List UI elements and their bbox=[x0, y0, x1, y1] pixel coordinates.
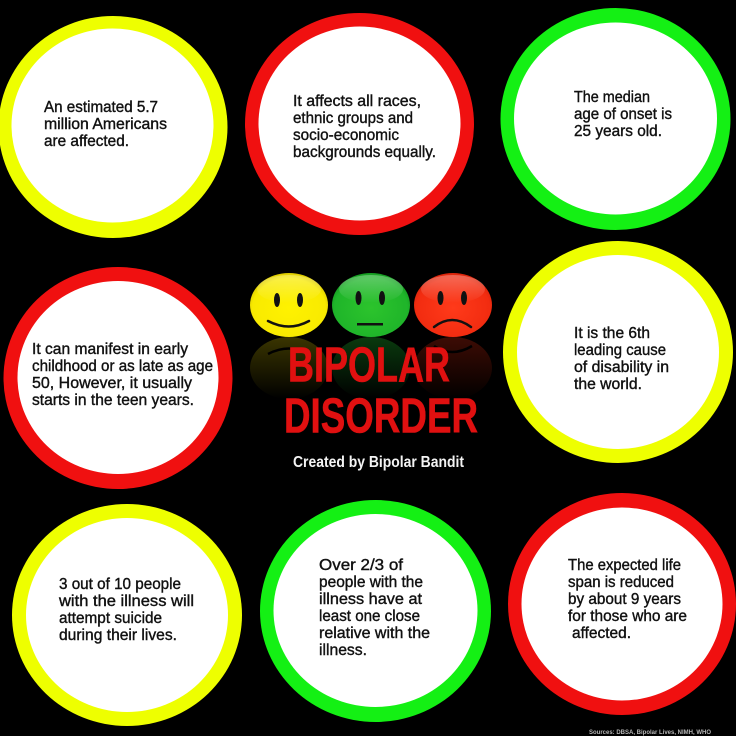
panel: 6th leading cause: of disability in bbox=[574, 359, 669, 376]
panel: life span reduced: span is reduced bbox=[568, 574, 674, 591]
panel: attempt suicide: attempt suicide bbox=[59, 610, 162, 627]
panel: median age of onset: age of onset is bbox=[574, 106, 672, 123]
panel: all races: socio-economic bbox=[293, 127, 399, 144]
panel: all races: backgrounds equally. bbox=[293, 144, 436, 161]
panel: median age of onset bbox=[500, 8, 730, 230]
panel: all races: It affects all races, bbox=[293, 93, 421, 110]
panel: attempt suicide bbox=[12, 504, 242, 726]
sources note: Sources: DBSA, Bipolar Lives, NIMH, WHO bbox=[589, 729, 711, 736]
title bbox=[284, 338, 478, 444]
icon: red sad face bbox=[414, 273, 492, 337]
panel: manifest in early childhood: childhood or as late as age bbox=[32, 358, 213, 375]
panel: attempt suicide: during their lives. bbox=[59, 627, 177, 644]
panel: life span reduced: The expected life bbox=[568, 557, 681, 574]
panel: 6th leading cause: leading cause bbox=[574, 342, 666, 359]
panel: 5.7 million Americans: are affected. bbox=[44, 133, 129, 150]
panel: close relative: relative with the bbox=[319, 625, 430, 642]
panel: manifest in early childhood: starts in the teen years. bbox=[32, 392, 194, 409]
panel: close relative: illness have at bbox=[319, 591, 423, 608]
panel: 5.7 million Americans: million Americans bbox=[44, 116, 167, 133]
credit line: Created by Bipolar Bandit bbox=[293, 454, 465, 471]
panel: life span reduced: for those who are bbox=[568, 608, 687, 625]
panel: attempt suicide: 3 out of 10 people bbox=[59, 576, 181, 593]
panel: manifest in early childhood: 50, However, it usually bbox=[32, 375, 192, 392]
panel: life span reduced bbox=[508, 493, 736, 715]
panel: 5.7 million Americans: An estimated 5.7 bbox=[44, 99, 158, 116]
panel: 6th leading cause: It is the 6th bbox=[574, 325, 650, 342]
panel: 6th leading cause: the world. bbox=[574, 376, 642, 393]
panel: all races: ethnic groups and bbox=[293, 110, 413, 127]
panel: close relative: illness. bbox=[319, 642, 367, 659]
panel: attempt suicide: with the illness will bbox=[58, 593, 194, 610]
panel: median age of onset: 25 years old. bbox=[574, 123, 662, 140]
panel: close relative: people with the bbox=[319, 574, 423, 591]
panel: 6th leading cause bbox=[503, 241, 733, 463]
panel: median age of onset: The median bbox=[574, 89, 650, 106]
panel: manifest in early childhood bbox=[4, 267, 232, 489]
title: BIPOLAR bbox=[288, 338, 450, 392]
panel: life span reduced: affected. bbox=[572, 625, 631, 642]
panel: manifest in early childhood: It can manifest in early bbox=[32, 341, 188, 358]
panel: life span reduced: by about 9 years bbox=[568, 591, 681, 608]
title: DISORDER bbox=[284, 390, 478, 444]
icon: green neutral face bbox=[332, 273, 410, 337]
panel: close relative bbox=[260, 500, 491, 722]
icon: face reflections bbox=[250, 337, 492, 399]
panel: all races bbox=[245, 13, 474, 235]
panel: close relative: least one close bbox=[319, 608, 420, 625]
panel: close relative: Over 2/3 of bbox=[319, 557, 404, 574]
panel: 5.7 million Americans bbox=[0, 16, 228, 238]
icon: yellow smiley face bbox=[250, 273, 328, 337]
